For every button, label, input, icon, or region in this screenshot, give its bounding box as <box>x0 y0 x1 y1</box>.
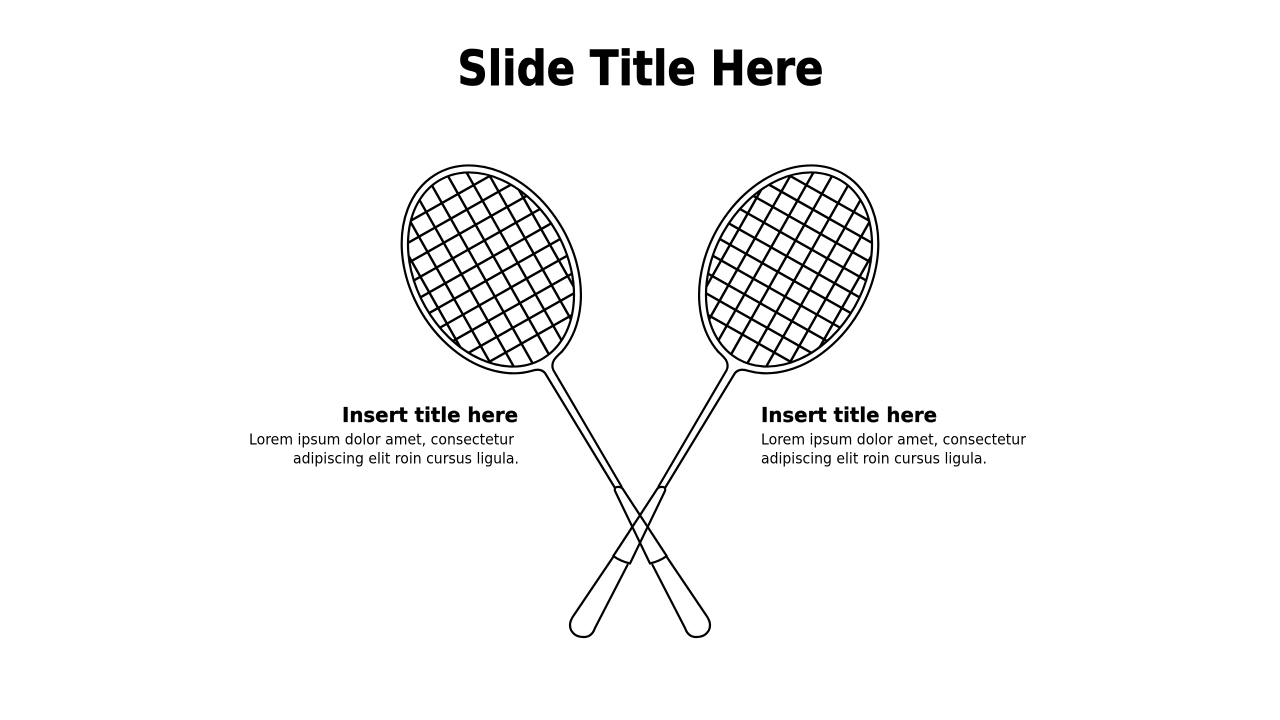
right body line 2: adipiscing elit roin cursus ligula. <box>761 450 987 468</box>
text block: left <box>249 403 519 468</box>
illustration: left racket <box>359 129 710 637</box>
handle <box>652 556 710 637</box>
grip collar <box>615 487 667 564</box>
handle <box>570 556 628 637</box>
left heading: Insert title here <box>342 403 518 427</box>
grip collar <box>613 487 665 564</box>
racket strings <box>409 174 573 366</box>
right body line 1: Lorem ipsum dolor amet, consectetur <box>761 430 1027 448</box>
left body line 1: Lorem ipsum dolor amet, consectetur <box>249 430 515 448</box>
racket head frame and shaft <box>658 143 905 488</box>
racket head frame and shaft <box>375 143 622 488</box>
illustration: right racket <box>568 164 880 638</box>
title: Slide Title Here <box>458 41 824 97</box>
left body line 2: adipiscing elit roin cursus ligula. <box>293 450 519 468</box>
right heading: Insert title here <box>761 403 937 427</box>
racket strings <box>707 174 871 366</box>
text block: right <box>761 403 1027 468</box>
